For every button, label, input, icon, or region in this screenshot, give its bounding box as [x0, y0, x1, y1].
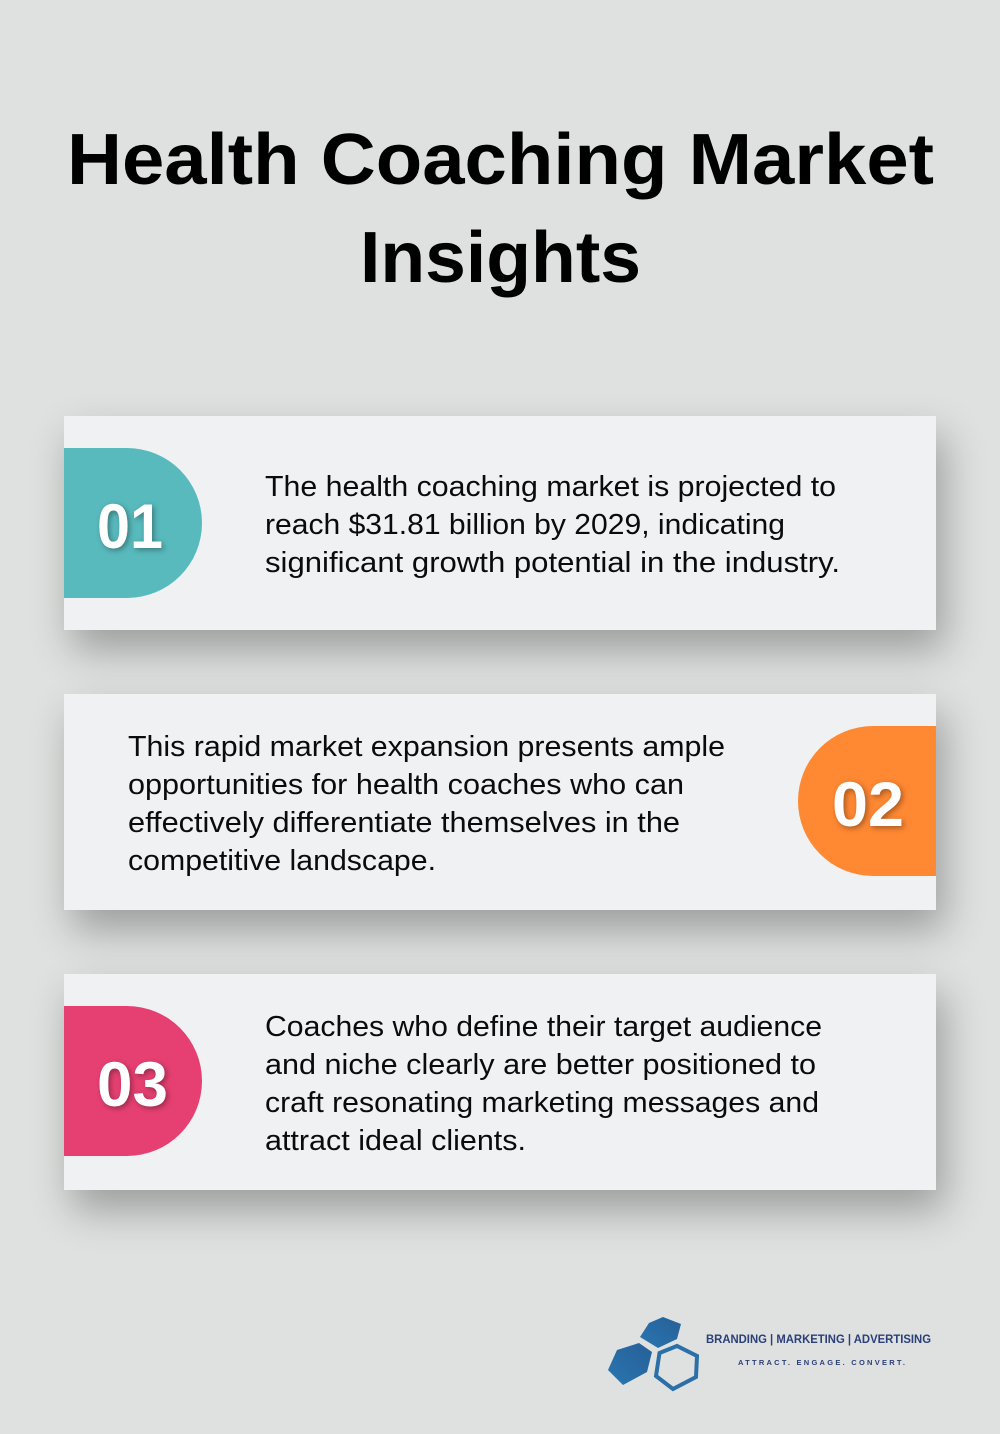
- badge: 02: 02: [832, 770, 904, 840]
- logo: BRANDING | MARKETING | ADVERTISING: [706, 1334, 931, 1346]
- text: insight 03: attract ideal clients.: [265, 1125, 526, 1157]
- text: insight 03: and niche clearly are better positioned to: [265, 1049, 816, 1081]
- text: insight 01: significant growth potential in the industry.: [265, 547, 840, 579]
- text: insight 03: [265, 1011, 822, 1157]
- text: insight 02: This rapid market expansion presents ample: [128, 731, 725, 763]
- panel: insight 03: [64, 974, 936, 1190]
- badge: 02: [798, 726, 936, 876]
- title: Health Coaching Market: [67, 120, 934, 200]
- title: [67, 120, 934, 298]
- logo: ATTRACT. ENGAGE. CONVERT.: [738, 1358, 905, 1367]
- text: insight 01: [265, 471, 840, 579]
- text: insight 02: opportunities for health coaches who can: [128, 769, 684, 801]
- text: insight 01: reach $31.81 billion by 2029, indicating: [265, 509, 785, 541]
- text: insight 02: [128, 731, 725, 877]
- text: insight 01: The health coaching market is projected to: [265, 471, 836, 503]
- text: insight 03: craft resonating marketing messages and: [265, 1087, 819, 1119]
- panel: insight 02: [64, 694, 936, 910]
- title: Insights: [360, 218, 641, 298]
- text: insight 02: competitive landscape.: [128, 845, 436, 877]
- badge: 03: 03: [97, 1050, 168, 1120]
- badge: 01: [64, 448, 202, 598]
- text: insight 03: Coaches who define their target audience: [265, 1011, 822, 1043]
- panel: insight 01: [64, 416, 936, 630]
- text: insight 02: effectively differentiate themselves in the: [128, 807, 680, 839]
- badge: 03: [64, 1006, 202, 1156]
- badge: 01: 01: [97, 492, 163, 562]
